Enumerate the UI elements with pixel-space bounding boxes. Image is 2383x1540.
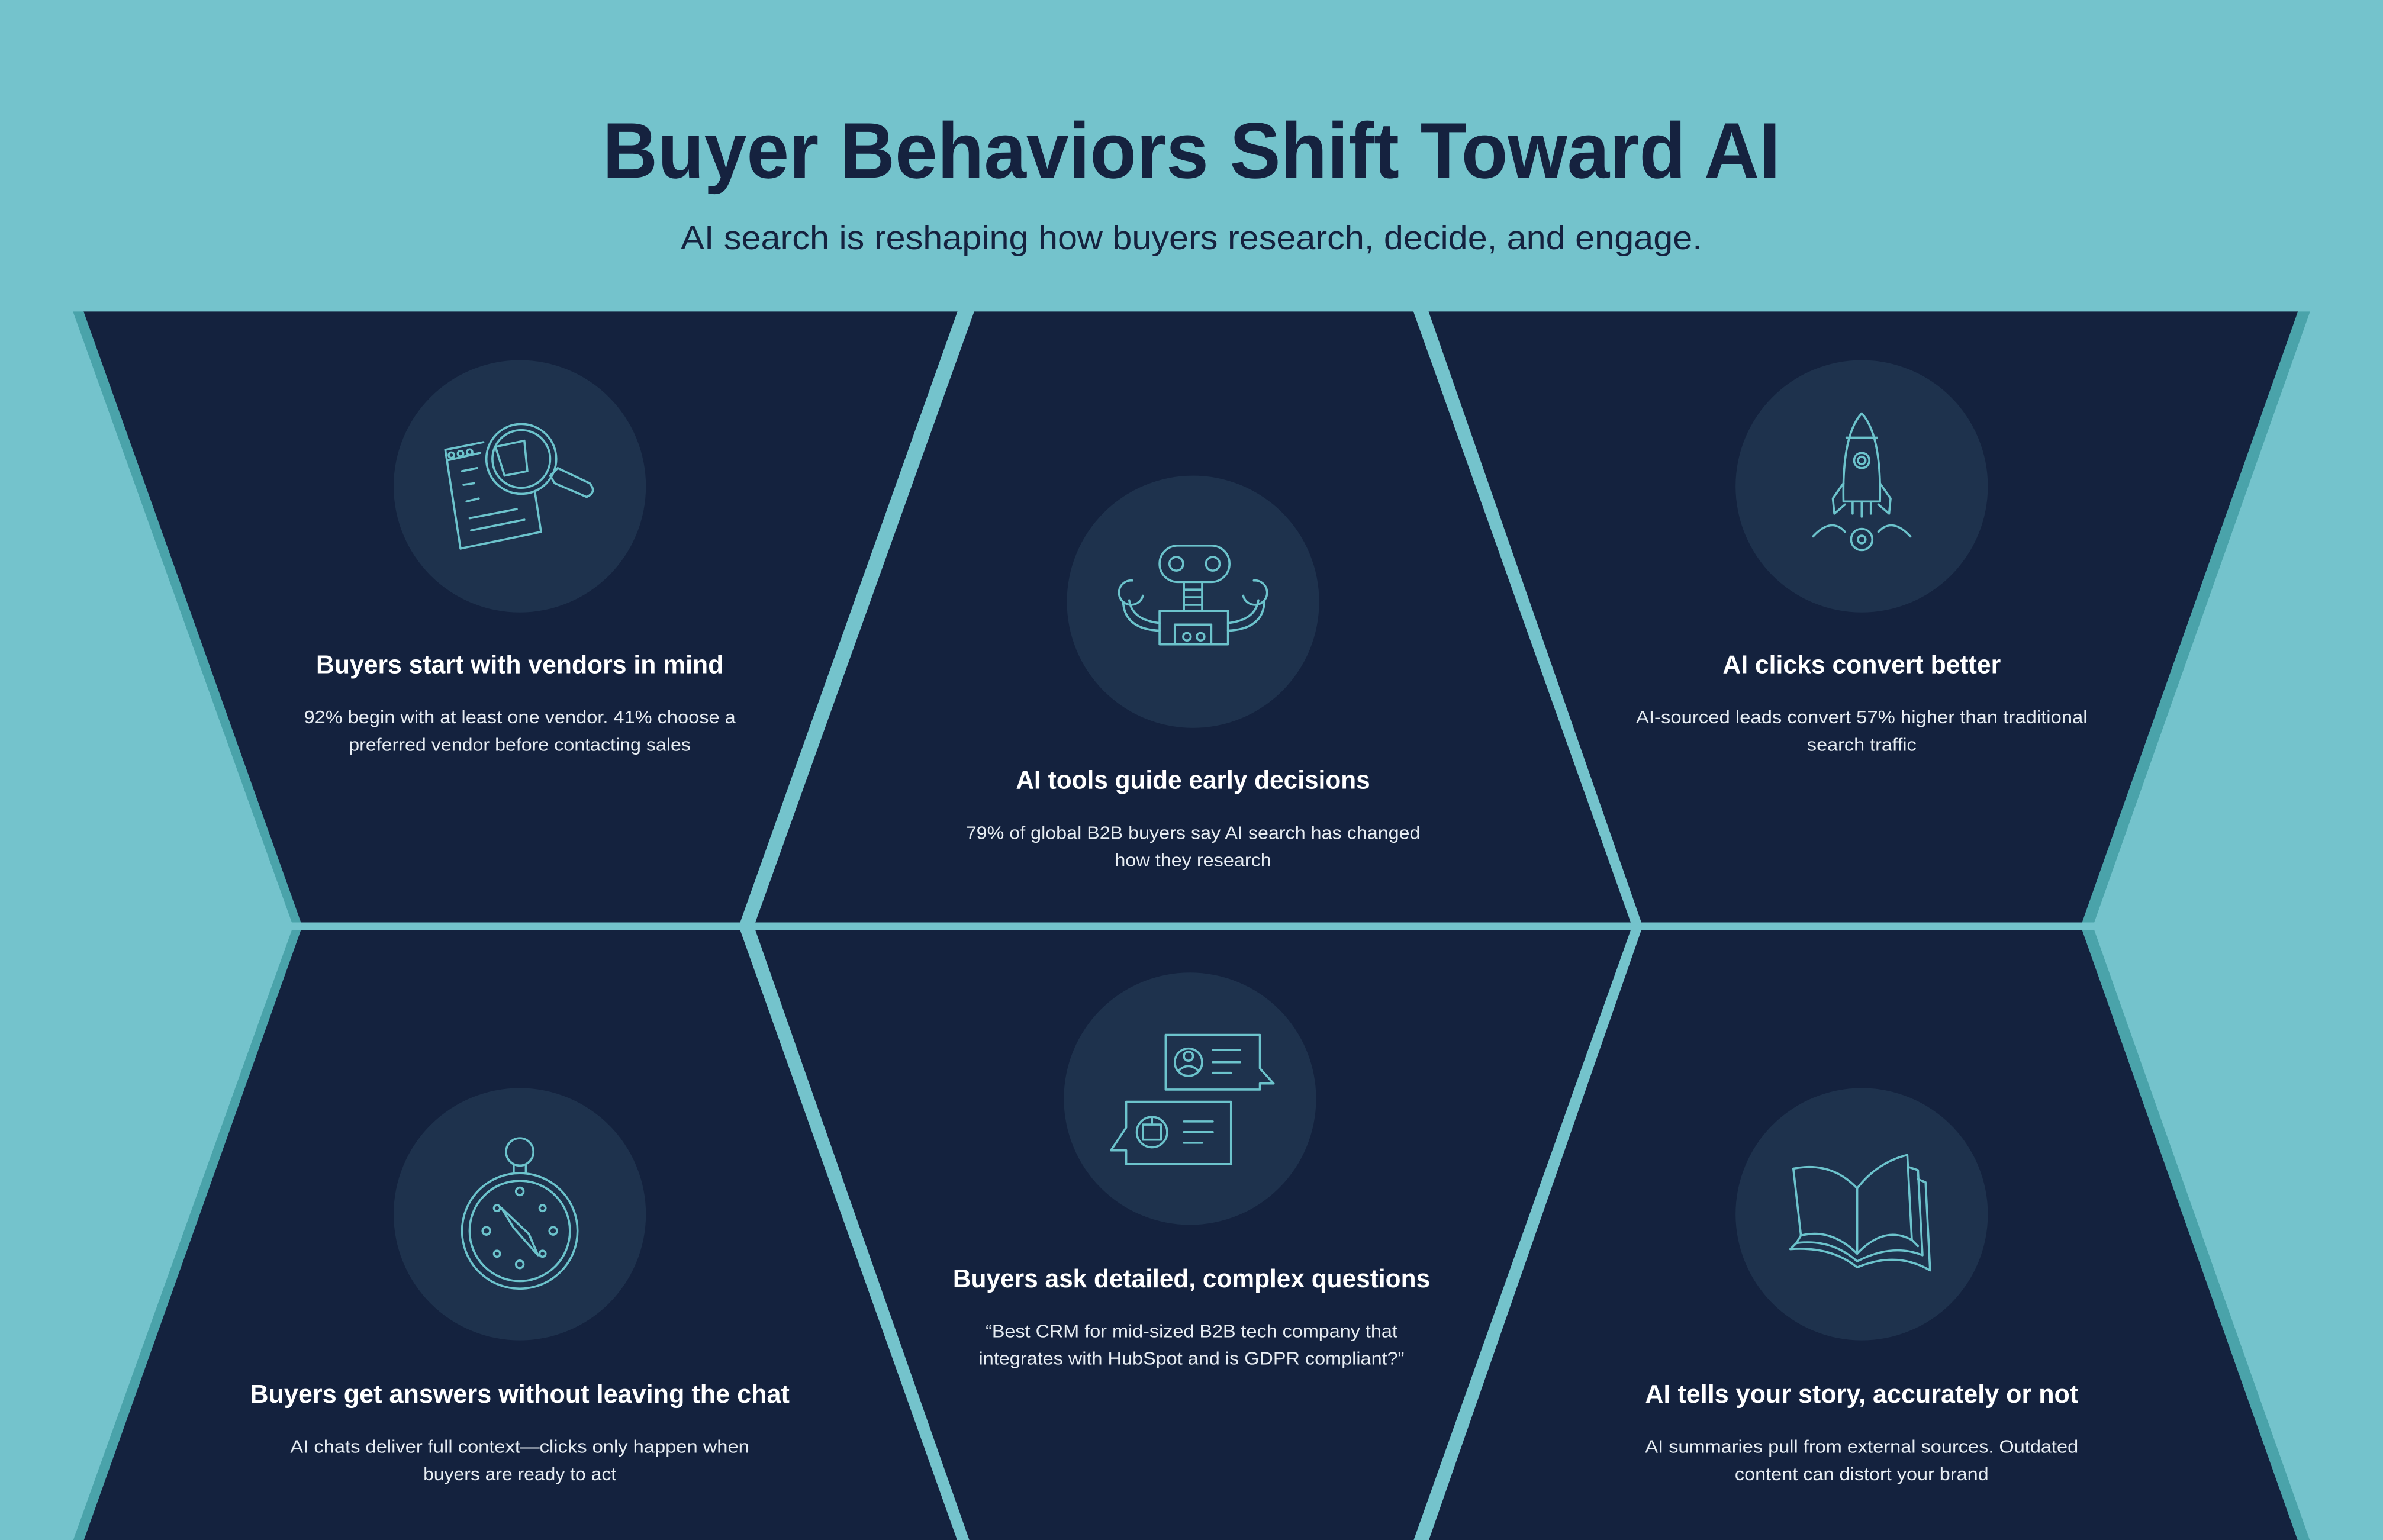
icon: open book	[1735, 1088, 1988, 1341]
body text: “Best CRM for mid-sized B2B tech company that	[986, 1320, 1397, 1341]
body text: AI-sourced leads convert 57% higher than traditional	[1636, 707, 2088, 727]
body text	[1645, 1436, 2078, 1484]
heading: AI tools guide early decisions	[1016, 766, 1370, 795]
heading: Buyers ask detailed, complex questions	[953, 1264, 1430, 1293]
body text	[304, 707, 736, 755]
body text: AI summaries pull from external sources. Outdated	[1645, 1436, 2078, 1457]
body text: search traffic	[1807, 734, 1917, 755]
panel: AI tools guide early decisions	[755, 311, 1631, 923]
heading: Buyers start with vendors in mind	[316, 650, 723, 679]
body text: AI chats deliver full context—clicks only happen when	[290, 1436, 749, 1457]
panel: buyers ask detailed, complex questions	[755, 930, 1631, 1540]
body text: content can distort your brand	[1735, 1464, 1989, 1484]
heading: Buyers get answers without leaving the chat	[250, 1380, 790, 1409]
body text: integrates with HubSpot and is GDPR compliant?”	[979, 1348, 1404, 1369]
panel: AI clicks convert better	[1429, 311, 2310, 923]
body text: preferred vendor before contacting sales	[349, 734, 691, 755]
body text: 79% of global B2B buyers say AI search has changed	[966, 822, 1420, 843]
icon: robot	[1067, 476, 1319, 728]
panel: AI tells your story	[1429, 930, 2310, 1540]
title: Buyer Behaviors Shift Toward AI	[603, 107, 1780, 195]
icon: document with magnifier	[394, 360, 646, 613]
body text: 92% begin with at least one vendor. 41% choose a	[304, 707, 736, 727]
body text	[290, 1436, 749, 1484]
body text: buyers are ready to act	[423, 1464, 617, 1484]
icon: chat bubbles	[1064, 972, 1316, 1225]
heading: AI tells your story, accurately or not	[1645, 1380, 2078, 1409]
panel: buyers get answers without leaving the chat	[73, 930, 958, 1540]
subtitle: AI search is reshaping how buyers research, decide, and engage.	[681, 219, 1702, 256]
body text	[979, 1320, 1404, 1369]
icon: compass	[394, 1088, 646, 1341]
body text: how they research	[1115, 850, 1271, 871]
body text	[1636, 707, 2088, 755]
heading: AI clicks convert better	[1722, 650, 2001, 679]
body text	[966, 822, 1420, 871]
panel: buyers start with vendors in mind	[73, 311, 958, 923]
icon: rocket	[1735, 360, 1988, 613]
